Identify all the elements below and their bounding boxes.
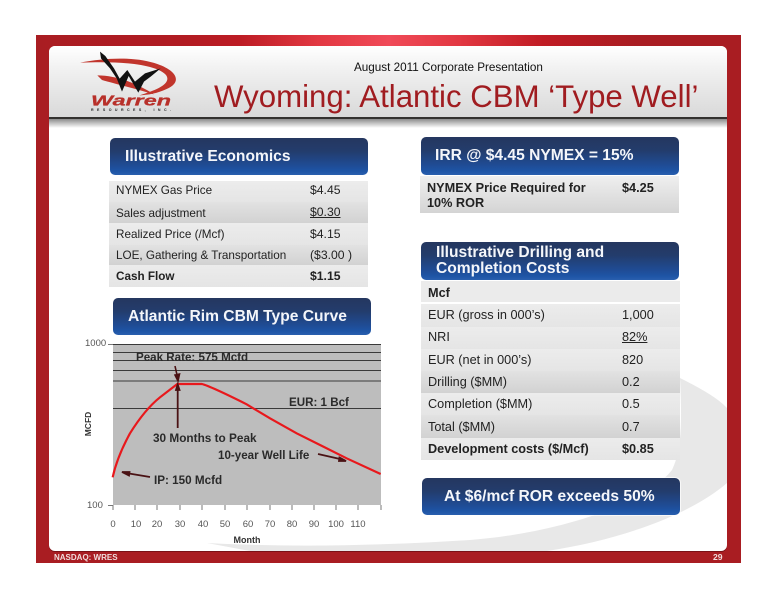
arrow: to peak rate <box>175 366 180 381</box>
panel: illustrative economics <box>109 138 368 287</box>
top frame highlight <box>36 35 741 47</box>
main title: Wyoming: Atlantic CBM ‘Type Well’ <box>214 79 698 114</box>
annotation: EUR: EUR: 1 Bcf <box>289 396 349 409</box>
x axis labels: 30 <box>175 519 185 530</box>
logo wordmark: Warren <box>91 92 171 110</box>
footer ticker: NASDAQ: WRES <box>54 553 118 562</box>
x axis labels: 50 <box>220 519 230 530</box>
heading: type curve <box>113 298 371 335</box>
row: NRI: NRI <box>428 330 450 344</box>
x axis labels <box>110 519 366 530</box>
row: sales adjustment <box>109 202 368 223</box>
row: Mcf header <box>421 281 680 302</box>
x axis labels: 20 <box>152 519 162 530</box>
arrow: well life <box>318 454 346 461</box>
row: development costs <box>421 438 680 460</box>
row: Mcf header: Mcf <box>428 286 450 300</box>
callout: ROR <box>422 478 680 515</box>
row: EUR net <box>421 349 680 371</box>
x axis labels: 0 <box>110 519 116 530</box>
panel: drilling and completion costs <box>421 242 680 460</box>
row: NRI: 82% <box>622 330 647 344</box>
logo: Warren Resources <box>80 52 176 112</box>
row: LOE <box>109 245 368 265</box>
annotation: peak rate: Peak Rate: 575 Mcfd <box>136 351 248 364</box>
row: NYMEX gas price <box>109 181 368 202</box>
heading: type curve: Atlantic Rim CBM Type Curve <box>128 308 347 325</box>
row label: NYMEX Price Required for <box>427 181 586 195</box>
row: realized price: $4.15 <box>310 227 340 241</box>
row: NYMEX gas price: $4.45 <box>310 183 340 197</box>
x axis labels: 100 <box>328 519 344 530</box>
x axis labels: 110 <box>350 519 366 530</box>
red production curve <box>113 384 381 477</box>
callout: ROR: At $6/mcf ROR exceeds 50% <box>444 488 655 505</box>
x axis labels: 40 <box>198 519 208 530</box>
y axis labels: 100 <box>87 500 103 511</box>
axis ticks <box>108 344 381 510</box>
row: EUR gross <box>421 304 680 327</box>
NYMEX price required row <box>420 176 679 213</box>
heading: IRR <box>421 137 679 175</box>
x axis labels: 90 <box>309 519 319 530</box>
logo subline: RESOURCES, INC. <box>91 108 171 112</box>
row label: 10% ROR <box>427 196 484 210</box>
row label <box>427 181 586 210</box>
heading: illustrative economics: Illustrative Economics <box>125 148 291 165</box>
heading: drilling costs: Illustrative Drilling and <box>436 244 604 261</box>
row: EUR gross: EUR (gross in 000’s) <box>428 308 545 322</box>
row: total: Total ($MM) <box>428 420 495 434</box>
row: completion <box>421 393 680 415</box>
logo swoosh <box>80 59 176 95</box>
row: LOE: ($3.00 ) <box>310 248 352 262</box>
cost table <box>421 281 680 460</box>
row: LOE: LOE, Gathering & Transportation <box>116 249 286 262</box>
row: EUR gross: 1,000 <box>622 308 654 322</box>
white slide area <box>49 46 727 551</box>
row: EUR net: 820 <box>622 353 643 367</box>
x axis labels: 10 <box>131 519 141 530</box>
row: completion: 0.5 <box>622 397 640 411</box>
x axis labels: 70 <box>265 519 275 530</box>
y axis labels <box>85 338 106 511</box>
arrow: IP <box>122 472 150 477</box>
heading: drilling costs <box>421 242 679 280</box>
row: cash flow: $1.15 <box>310 269 340 283</box>
logo W mark <box>100 52 161 93</box>
y axis labels: 1000 <box>85 338 106 349</box>
annotation: initial production: IP: 150 Mcfd <box>154 474 222 487</box>
chart: Atlantic Rim CBM type curve <box>83 338 382 545</box>
row: NRI <box>421 327 680 349</box>
page number: 29 <box>713 552 723 562</box>
row value: $4.25 <box>622 181 654 195</box>
row: sales adjustment: $0.30 <box>310 205 340 219</box>
plot area <box>113 344 381 505</box>
arrow: 30 months <box>176 384 180 428</box>
header band <box>49 46 727 119</box>
row: development costs: $0.85 <box>622 442 654 456</box>
row: realized price <box>109 223 368 245</box>
annotation: well life: 10-year Well Life <box>218 449 310 462</box>
panel: IRR <box>420 137 679 213</box>
row: drilling <box>421 371 680 393</box>
x axis title: Month <box>234 535 260 545</box>
row: total: 0.7 <box>622 420 640 434</box>
row: completion: Completion ($MM) <box>428 397 532 411</box>
row: EUR net: EUR (net in 000’s) <box>428 353 531 367</box>
heading: drilling costs: Completion Costs <box>436 260 569 277</box>
x axis labels: 60 <box>243 519 253 530</box>
row: drilling: Drilling ($MM) <box>428 375 507 389</box>
row: total <box>421 415 680 438</box>
logo lower stroke <box>97 75 154 94</box>
annotation: months to peak: 30 Months to Peak <box>153 431 257 445</box>
y axis title: MCFD <box>83 412 93 436</box>
heading: illustrative economics <box>110 138 368 175</box>
red slide frame <box>36 35 741 563</box>
row: cash flow <box>109 265 368 287</box>
row: NYMEX gas price: NYMEX Gas Price <box>116 184 212 197</box>
header subtitle: August 2011 Corporate Presentation <box>354 61 543 74</box>
economics table <box>109 181 368 287</box>
header shadow <box>49 119 727 128</box>
row: cash flow: Cash Flow <box>116 270 174 283</box>
heading: IRR: IRR @ $4.45 NYMEX = 15% <box>435 147 634 164</box>
row: sales adjustment: Sales adjustment <box>116 207 206 220</box>
x axis labels: 80 <box>287 519 297 530</box>
row: development costs: Development costs ($/Mcf) <box>428 442 589 456</box>
row: realized price: Realized Price (/Mcf) <box>116 228 224 241</box>
grid lines <box>113 344 381 408</box>
row: drilling: 0.2 <box>622 375 640 389</box>
